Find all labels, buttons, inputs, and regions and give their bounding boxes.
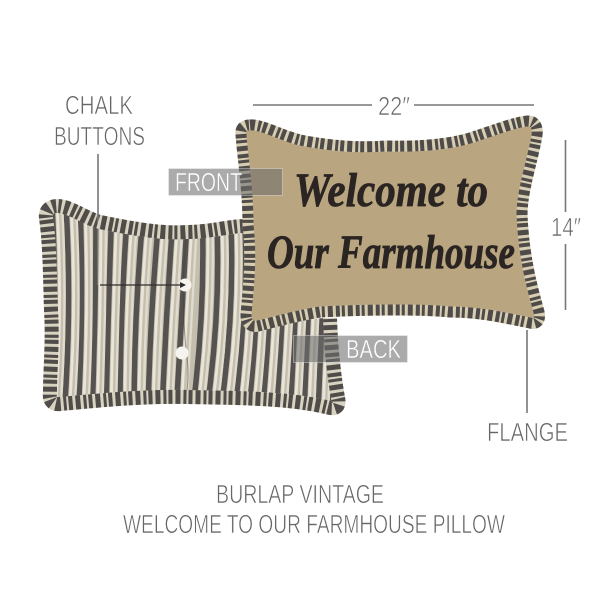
callout: chalk buttons: BUTTONS [54, 123, 145, 151]
label: FRONT: FRONT [175, 169, 242, 197]
dimension: 22 inch width: 22″ [378, 93, 410, 121]
pillow lettering: Welcome to: Welcome to [294, 164, 488, 217]
callout: chalk buttons: CHALK [65, 92, 133, 120]
callout: flange [487, 330, 568, 447]
back pillow ruffle [46, 206, 339, 408]
back pillow seam [183, 232, 188, 397]
front pillow ruffle [241, 121, 540, 326]
chalk buttons pointer line [98, 154, 186, 288]
front pillow [241, 121, 540, 326]
back pillow striped fabric [52, 213, 332, 402]
title [123, 481, 505, 539]
pillow lettering: Our Farmhouse: Our Farmhouse [267, 226, 515, 279]
dimension: 14 inch height: 14″ [551, 214, 581, 242]
button: lower chalk button [176, 346, 188, 360]
label: BACK: BACK [346, 336, 401, 364]
front pillow burlap body [241, 121, 540, 326]
callout: flange: FLANGE [487, 419, 568, 447]
label: BACK [294, 336, 408, 364]
button: upper chalk button [178, 278, 192, 292]
back pillow [40, 200, 352, 420]
callout: chalk buttons [54, 92, 145, 151]
title: BURLAP VINTAGE [216, 481, 384, 509]
